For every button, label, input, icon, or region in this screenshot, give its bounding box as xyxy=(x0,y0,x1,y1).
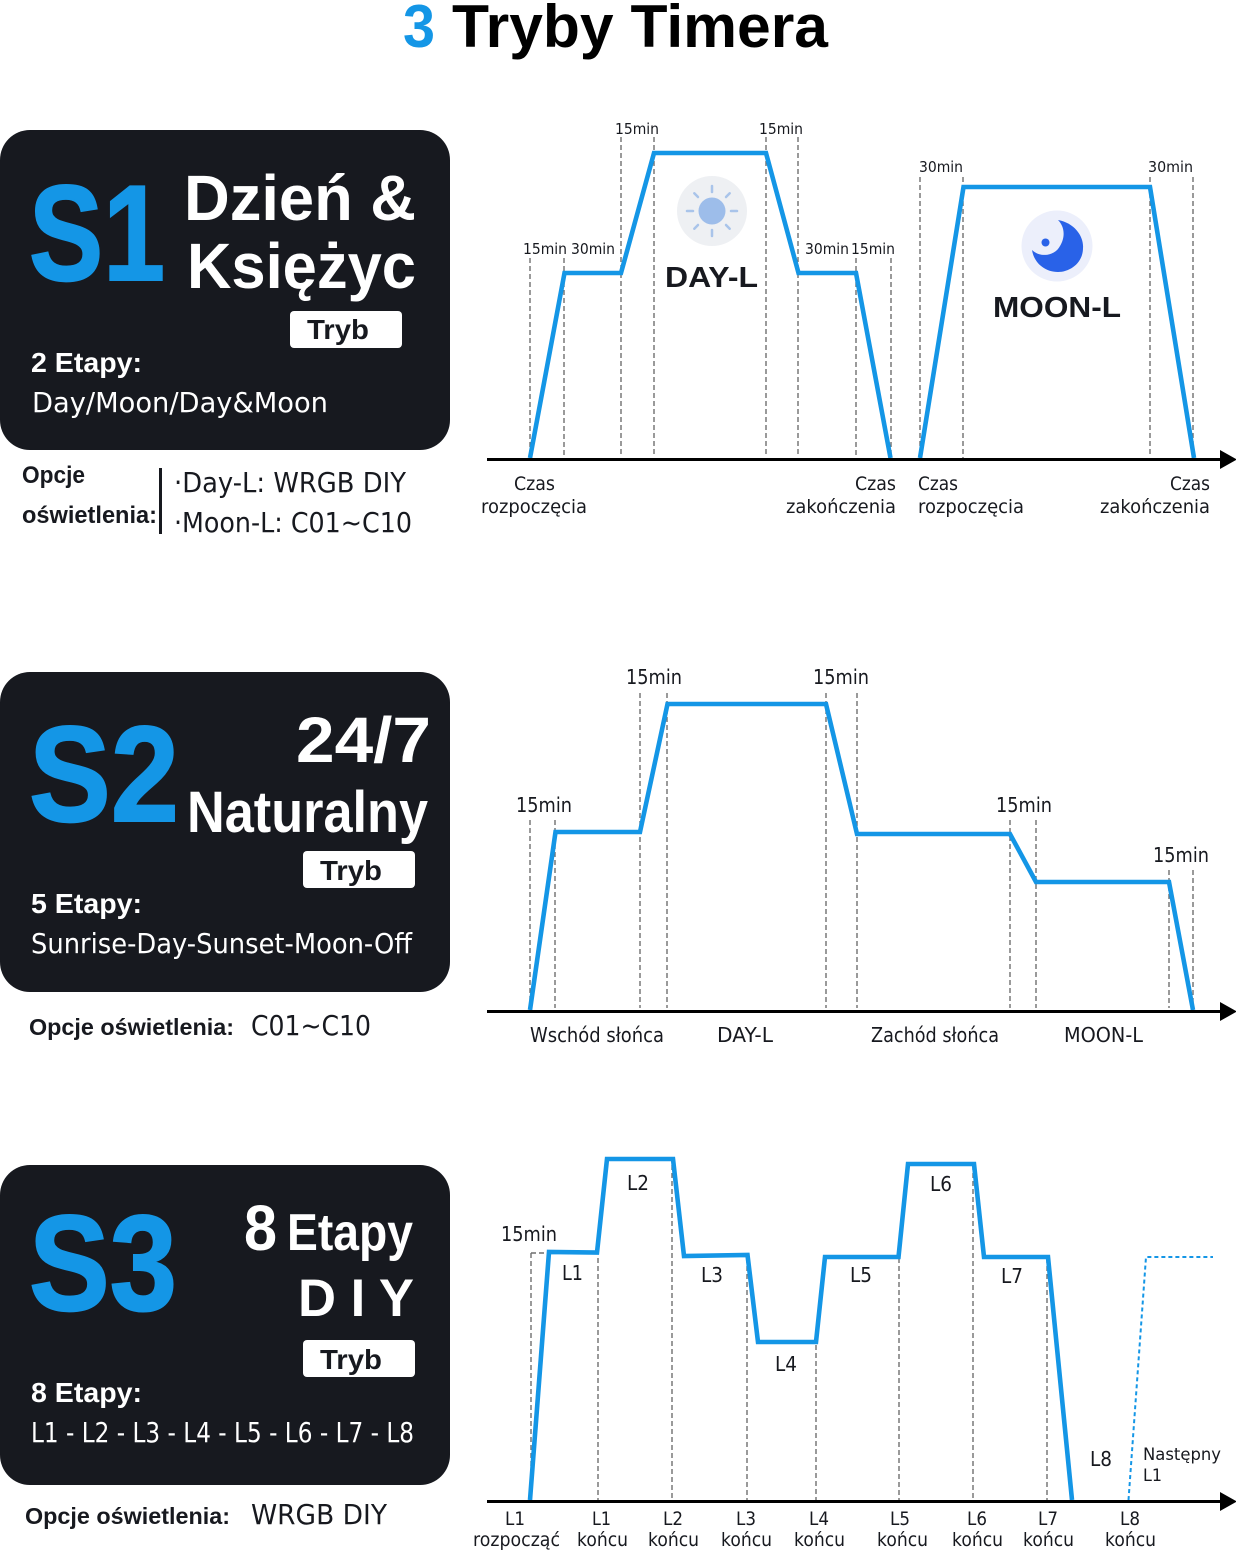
S3 stage labels: L6 xyxy=(930,1172,952,1196)
next L1 note: L1 xyxy=(1143,1466,1162,1486)
S3 stages text: L1 - L2 - L3 - L4 - L5 - L6 - L7 - L8 xyxy=(31,1416,414,1449)
S3 axis labels: końcu xyxy=(794,1529,845,1551)
icon: sun xyxy=(677,176,747,246)
S1 heading: Księżyc xyxy=(187,230,416,302)
S1 code: S1 xyxy=(29,157,165,309)
S1 duration labels: 15min xyxy=(851,240,895,258)
S1 lighting options: ·Moon-L: C01~C10 xyxy=(174,506,412,539)
S2 lighting options: C01~C10 xyxy=(251,1009,371,1042)
S3 axis labels: końcu xyxy=(577,1529,628,1551)
S1 heading: Dzień & xyxy=(184,162,416,234)
S3 code: S3 xyxy=(29,1187,177,1339)
MOON-L label: MOON-L xyxy=(993,292,1121,324)
S3 axis labels: L1 xyxy=(592,1508,611,1530)
S1 axis labels: Czas xyxy=(514,473,555,495)
S3 lighting options xyxy=(25,1498,388,1531)
S3 stage labels: L1 xyxy=(562,1261,583,1285)
S3 axis labels: rozpocząć xyxy=(473,1529,560,1551)
next L1 note xyxy=(1143,1445,1221,1486)
S1 axis labels: Czas xyxy=(855,473,896,495)
chart: S2 natural timing xyxy=(487,665,1236,1047)
S1 axis labels: Czas xyxy=(918,473,958,495)
S3 axis labels: końcu xyxy=(1023,1529,1074,1551)
S3 axis labels: końcu xyxy=(952,1529,1003,1551)
S3 axis labels: końcu xyxy=(877,1529,928,1551)
S3 axis labels: końcu xyxy=(648,1529,699,1551)
S2 heading: 24/7 xyxy=(296,704,431,776)
S1 duration labels: 15min xyxy=(523,240,567,258)
S1 axis labels: rozpoczęcia xyxy=(918,496,1024,518)
S1 duration labels: 15min xyxy=(615,120,659,138)
S1 duration labels: 15min xyxy=(759,120,803,138)
S2 stages text: Sunrise-Day-Sunset-Moon-Off xyxy=(31,927,413,960)
S1 mode badge: Tryb xyxy=(307,314,369,345)
S1 axis labels: Czas xyxy=(1170,473,1210,495)
S2 axis labels xyxy=(530,1023,1144,1047)
S3 stage labels: L2 xyxy=(627,1171,649,1195)
S3 axis labels: L7 xyxy=(1038,1508,1058,1530)
S3 stage labels: L5 xyxy=(850,1263,872,1287)
S3 stages text: 8 Etapy: xyxy=(31,1377,142,1408)
S3 stage labels: L4 xyxy=(775,1352,797,1376)
S3 axis labels xyxy=(473,1508,1156,1551)
S1 mode badge xyxy=(290,311,402,348)
S2 duration labels xyxy=(516,665,1209,867)
DAY-L label: DAY-L xyxy=(665,262,758,294)
S3 axis labels: L5 xyxy=(890,1508,910,1530)
next L1 note: Następny xyxy=(1143,1445,1221,1465)
S2 axis labels: MOON-L xyxy=(1064,1023,1144,1047)
S2 heading xyxy=(187,704,431,845)
S3 stage labels: L3 xyxy=(701,1263,723,1287)
S2 code: S2 xyxy=(29,698,179,850)
S2 duration labels: 15min xyxy=(1153,843,1209,867)
S3 axis labels: końcu xyxy=(1105,1529,1156,1551)
S2 lighting options xyxy=(29,1009,371,1042)
S2 mode badge xyxy=(303,851,415,888)
S3 stage labels: L7 xyxy=(1001,1264,1023,1288)
S1 axis labels: zakończenia xyxy=(1100,496,1210,518)
S2 duration labels: 15min xyxy=(996,793,1052,817)
S1 duration labels: 30min xyxy=(571,240,615,258)
S2 duration labels: 15min xyxy=(626,665,682,689)
S3 mode badge xyxy=(303,1340,415,1377)
S3 axis labels: L3 xyxy=(736,1508,756,1530)
S3 heading: D I Y xyxy=(298,1269,414,1328)
S1 lighting options xyxy=(22,462,412,539)
S2 heading: Naturalny xyxy=(187,780,428,845)
S3 lighting options: Opcje oświetlenia: xyxy=(25,1503,230,1529)
panel: S1 day and moon mode xyxy=(0,130,450,450)
S2 stages text: 5 Etapy: xyxy=(31,888,142,919)
panel: S3 DIY mode xyxy=(0,1165,450,1485)
chart: S1 day and moon timing xyxy=(481,120,1236,518)
S1 duration labels: 30min xyxy=(1148,158,1193,176)
S1 stages text xyxy=(31,347,328,419)
S3 axis labels: końcu xyxy=(721,1529,772,1551)
S3 heading xyxy=(244,1192,414,1328)
S3 axis labels: L8 xyxy=(1120,1508,1140,1530)
S2 lighting options: Opcje oświetlenia: xyxy=(29,1014,234,1040)
S2 axis labels: Wschód słońca xyxy=(530,1023,664,1047)
S1 lighting options: oświetlenia: xyxy=(22,502,157,529)
S1 duration labels: 30min xyxy=(919,158,963,176)
S1 axis labels: zakończenia xyxy=(786,496,896,518)
S3 stages text xyxy=(31,1377,414,1449)
S1 duration labels: 30min xyxy=(805,240,849,258)
S2 mode badge: Tryb xyxy=(320,855,382,886)
S1 lighting options: Opcje xyxy=(22,462,85,489)
S2 stages text xyxy=(31,888,413,960)
S1 axis labels: rozpoczęcia xyxy=(481,496,587,518)
S3 axis labels: L6 xyxy=(967,1508,987,1530)
S3 axis labels: L4 xyxy=(809,1508,829,1530)
S3 axis labels: L2 xyxy=(663,1508,683,1530)
S1 stages text: 2 Etapy: xyxy=(31,347,142,378)
S3 mode badge: Tryb xyxy=(320,1344,382,1375)
S1 heading xyxy=(184,162,416,302)
S1 axis labels xyxy=(481,473,1210,518)
panel: S2 natural mode xyxy=(0,672,450,992)
S3 heading: Etapy xyxy=(287,1204,413,1262)
S2 axis labels: Zachód słońca xyxy=(871,1023,999,1047)
S3 lighting options: WRGB DIY xyxy=(251,1498,388,1531)
S2 duration labels: 15min xyxy=(813,665,869,689)
S2 axis labels: DAY-L xyxy=(717,1023,774,1047)
S3 stage labels: L8 xyxy=(1090,1447,1112,1471)
icon: moon xyxy=(1022,210,1092,282)
S3 stage labels xyxy=(562,1171,1112,1471)
S3 duration label: 15min xyxy=(501,1222,557,1246)
S2 duration labels: 15min xyxy=(516,793,572,817)
S3 heading: 8 xyxy=(244,1192,277,1264)
S1 stages text: Day/Moon/Day&Moon xyxy=(32,386,328,419)
chart: S3 eight stage timing xyxy=(473,1159,1236,1551)
S3 axis labels: L1 xyxy=(505,1508,525,1530)
S1 duration labels xyxy=(523,120,1193,258)
S1 lighting options: ·Day-L: WRGB DIY xyxy=(174,466,407,499)
